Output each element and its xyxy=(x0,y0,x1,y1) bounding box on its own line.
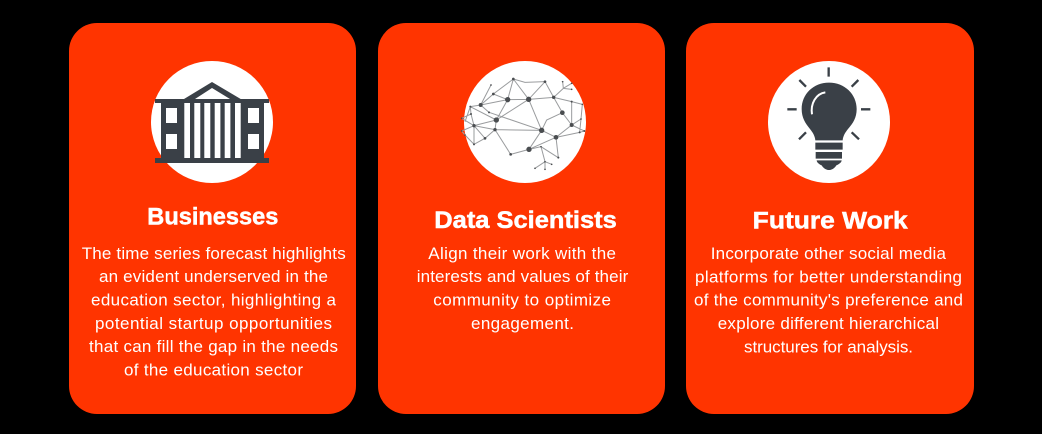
text block: future work description: structures for analysis. xyxy=(744,337,913,356)
icon: network globe xyxy=(461,61,586,183)
text block: data scientists description: Align their work with the xyxy=(428,244,616,263)
icon: light bulb xyxy=(768,61,890,183)
text block: businesses description: that can fill the gap in the needs xyxy=(89,337,338,356)
text block: data scientists description xyxy=(417,244,629,333)
text block: data scientists description: community to optimize xyxy=(433,291,611,310)
text block: businesses description: potential startup opportunities xyxy=(95,314,332,333)
text block: future work description: Incorporate other social media xyxy=(711,244,947,263)
text block: businesses description: The time series forecast highlights xyxy=(82,244,346,263)
text block: businesses description xyxy=(82,244,346,380)
text block: future work description: explore different hierarchical xyxy=(718,314,939,333)
heading: Data Scientists: Data Scientists xyxy=(434,207,617,234)
panel: businesses xyxy=(69,23,356,414)
text block: future work description: platforms for better understanding xyxy=(695,267,962,286)
text block: data scientists description: engagement. xyxy=(471,314,574,333)
text block: businesses description: an evident underserved in the xyxy=(99,267,328,286)
text block: future work description xyxy=(694,244,963,356)
heading: Future Work: Future Work xyxy=(753,207,908,234)
icon: building xyxy=(151,61,273,183)
text block: data scientists description: interests and values of their xyxy=(417,267,629,286)
heading: Businesses: Businesses xyxy=(147,203,278,230)
text block: businesses description: of the education sector xyxy=(124,361,303,380)
text block: businesses description: education sector, highlighting a xyxy=(91,291,337,310)
panel: future work xyxy=(686,23,974,414)
text block: future work description: of the community's preference and xyxy=(694,291,963,310)
panel: data scientists xyxy=(378,23,665,414)
